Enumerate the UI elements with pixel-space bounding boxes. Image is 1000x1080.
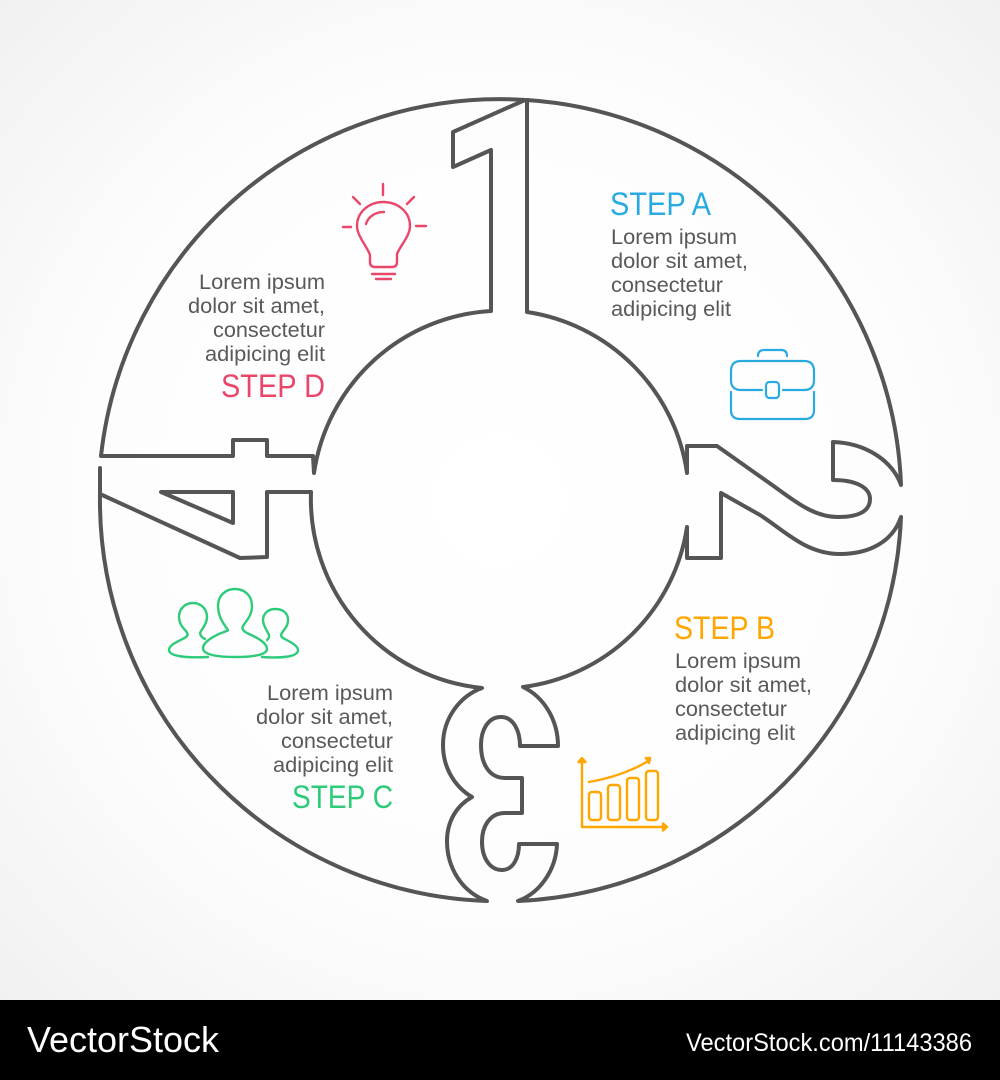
icon: bar chart — [578, 758, 667, 830]
icon: briefcase — [731, 350, 814, 419]
circular diagram — [100, 99, 901, 901]
step D text block — [188, 270, 325, 404]
step D body: Lorem ipsum — [199, 270, 325, 294]
step C body: dolor sit amet, — [256, 705, 393, 729]
step A body: dolor sit amet, — [611, 249, 748, 273]
step C text block — [256, 681, 393, 815]
step A body — [611, 225, 748, 321]
step D body: adipicing elit — [205, 342, 325, 366]
step A text block — [610, 186, 748, 321]
segment C with left of numeral 3 and bottom of numeral 4 — [100, 468, 487, 901]
step C body — [256, 681, 393, 777]
segment A with top of numeral 2 — [527, 100, 901, 517]
numeral 4 inner triangle — [161, 492, 233, 523]
step B text block — [674, 610, 812, 745]
step A body: adipicing elit — [611, 297, 731, 321]
footer url: VectorStock.com/11143386 — [686, 1029, 972, 1057]
step B body: consectetur — [675, 697, 787, 721]
step C body: adipicing elit — [273, 753, 393, 777]
step A body: consectetur — [611, 273, 723, 297]
step B body — [675, 649, 812, 745]
footer bar — [0, 1000, 1000, 1080]
icon: people — [169, 589, 298, 657]
step C heading: STEP C — [292, 779, 393, 815]
icon: light bulb — [343, 184, 426, 279]
step B body: adipicing elit — [675, 721, 795, 745]
step B body: dolor sit amet, — [675, 673, 812, 697]
step D body: dolor sit amet, — [188, 294, 325, 318]
segment D with numeral 1 and top of numeral 4 — [101, 99, 525, 473]
step D body — [188, 270, 325, 366]
segment B with bottom of numerals 2 and 3 — [481, 493, 901, 901]
step C body: Lorem ipsum — [267, 681, 393, 705]
step B body: Lorem ipsum — [675, 649, 801, 673]
step A body: Lorem ipsum — [611, 225, 737, 249]
step A heading: STEP A — [610, 186, 712, 222]
footer brand: VectorStock — [27, 1019, 220, 1060]
step D body: consectetur — [213, 318, 325, 342]
step D heading: STEP D — [221, 368, 325, 404]
step B heading: STEP B — [674, 610, 775, 646]
step C body: consectetur — [281, 729, 393, 753]
